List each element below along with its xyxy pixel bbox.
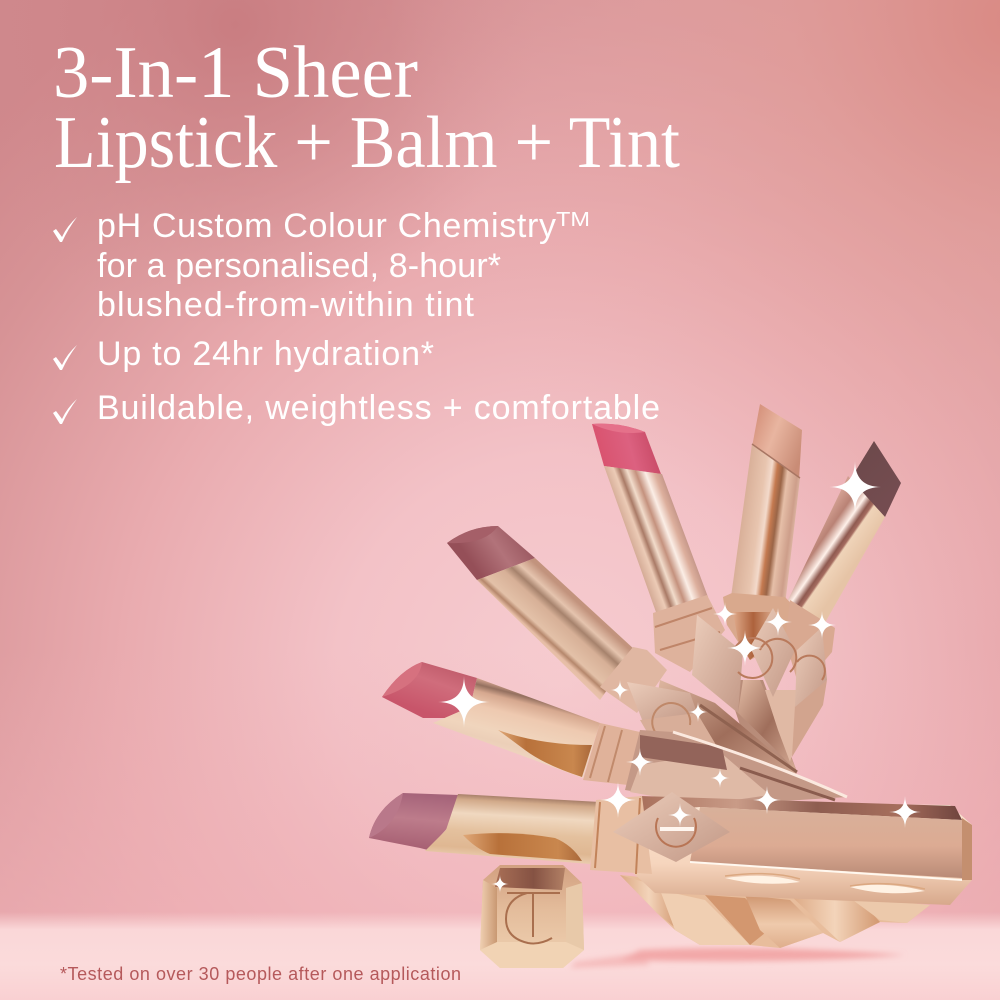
base fan under case: [620, 875, 930, 948]
benefit 1 text: pH Custom Colour Chemistry: [97, 207, 556, 245]
lipstick: deep plum shade: [788, 441, 901, 628]
benefit 1 text: [97, 207, 590, 324]
lipstick: coral pink shade: [592, 424, 708, 615]
footnote: *Tested on over 30 people after one application: [60, 964, 461, 984]
floor surface: [0, 912, 1000, 1000]
title: 3-In-1 Sheer: [53, 32, 418, 114]
lipstick case with diamond emblem: [630, 796, 972, 905]
benefit 3 text: Buildable, weightless + comfortable: [97, 389, 660, 427]
collars: [653, 595, 725, 672]
icon: check mark 1: [53, 217, 77, 242]
title: [53, 32, 680, 184]
benefit 1 text: blushed-from-within tint: [97, 286, 475, 324]
lipstick: rose shade: [382, 662, 847, 805]
icon: check mark 2: [53, 345, 77, 370]
benefit 1 text: TM: [556, 209, 590, 231]
long facets behind: [725, 680, 797, 772]
sparkles: [438, 461, 921, 893]
lipstick handles upper cluster: [653, 593, 835, 772]
title: Lipstick + Balm + Tint: [54, 102, 680, 184]
diamond facets: [692, 615, 743, 713]
benefit 1 text: for a personalised, 8-hour*: [97, 247, 501, 285]
diamond emblem: [613, 792, 730, 862]
lipstick cap with CT monogram: [480, 865, 584, 968]
lipstick: nude shade: [731, 404, 802, 605]
lipstick: muted rose shade resting on cap: [369, 793, 652, 874]
lipstick: mauve shade: [447, 526, 797, 790]
CT monogram: [506, 893, 560, 943]
lipstick fan: [369, 404, 972, 968]
benefits list: [53, 207, 660, 427]
icon: check mark 3: [53, 399, 77, 424]
benefit 2 text: Up to 24hr hydration*: [97, 335, 434, 373]
product shadow on floor: [570, 948, 905, 968]
